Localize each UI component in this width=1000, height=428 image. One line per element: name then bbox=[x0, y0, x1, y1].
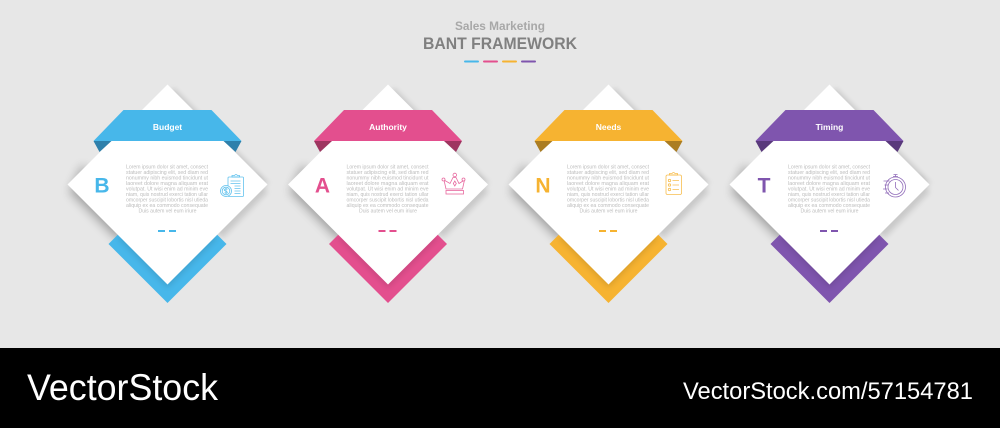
diamond bbox=[68, 84, 268, 284]
ribbon label: Budget bbox=[153, 122, 182, 132]
body text: Duis autem vel eum iriure bbox=[580, 208, 638, 214]
body text: aliquip ex ea commodo consequate bbox=[346, 203, 429, 209]
letter: B bbox=[94, 174, 110, 198]
body text: niam, quis nostrud exerci tation ullar bbox=[567, 192, 649, 198]
body text: volutpat. Ut wisi enim ad minim eve bbox=[567, 186, 649, 192]
small dashes bbox=[158, 230, 176, 232]
panel: Needs bbox=[508, 84, 710, 303]
body text: nonummy nibh euismod tincidunt ut bbox=[567, 176, 650, 182]
body text: aliquip ex ea commodo consequate bbox=[567, 203, 649, 209]
body text: laoreet dolore magna aliquam erat bbox=[788, 181, 871, 187]
panel: Authority bbox=[288, 84, 490, 303]
ribbon bbox=[534, 110, 682, 141]
body text: volutpat. Ut wisi enim ad minim eve bbox=[126, 186, 208, 192]
body text: omcorper suscipit lobortis nisl utieda bbox=[126, 198, 208, 204]
body text: Duis autem vel eum iriure bbox=[359, 208, 417, 214]
body text bbox=[346, 164, 429, 214]
body text bbox=[126, 164, 209, 214]
letter: A bbox=[315, 174, 330, 198]
body text: niam, quis nostrud exerci tation ullar bbox=[346, 192, 429, 198]
ribbon label: Authority bbox=[369, 122, 407, 132]
title colour dashes bbox=[464, 60, 536, 62]
body text: laoreet dolore magna aliquam erat bbox=[567, 181, 650, 187]
body text: laoreet dolore magna aliquam erat bbox=[346, 181, 429, 187]
ribbon label: Needs bbox=[596, 122, 622, 132]
body text: statuer adipiscing elit, sed diam red bbox=[788, 170, 870, 176]
ribbon label: Timing bbox=[816, 122, 843, 132]
diamond bbox=[508, 84, 708, 284]
diamond bbox=[288, 84, 488, 284]
ribbon bbox=[314, 110, 462, 141]
body text: Lorem ipsum dolor sit amet, consect bbox=[126, 164, 209, 170]
icon: stopwatch bbox=[883, 174, 906, 197]
letter: N bbox=[535, 174, 551, 198]
small dashes bbox=[820, 230, 838, 232]
body text: laoreet dolore magna aliquam erat bbox=[126, 181, 209, 187]
body text: nonummy nibh euismod tincidunt ut bbox=[126, 176, 209, 182]
small dashes bbox=[378, 230, 396, 232]
folds bbox=[534, 141, 682, 152]
panel: Timing bbox=[730, 84, 932, 303]
icon: crown bbox=[442, 173, 465, 194]
body text: Lorem ipsum dolor sit amet, consect bbox=[346, 164, 429, 170]
chevron bbox=[329, 234, 447, 303]
title bbox=[423, 21, 578, 53]
body text: omcorper suscipit lobortis nisl utieda bbox=[346, 198, 429, 204]
icon: clipboard with coin bbox=[220, 174, 244, 196]
body text: nonummy nibh euismod tincidunt ut bbox=[346, 176, 429, 182]
chevron bbox=[770, 234, 888, 303]
body text: Duis autem vel eum iriure bbox=[138, 208, 197, 214]
chevron bbox=[550, 234, 668, 303]
ribbon bbox=[756, 110, 904, 141]
body text: aliquip ex ea commodo consequate bbox=[126, 203, 208, 209]
letter: T bbox=[758, 174, 771, 198]
title: BANT FRAMEWORK bbox=[423, 34, 578, 53]
folds bbox=[756, 141, 904, 152]
footer url: VectorStock.com/57154781 bbox=[683, 378, 973, 405]
folds bbox=[314, 141, 462, 152]
body text: volutpat. Ut wisi enim ad minim eve bbox=[346, 186, 429, 192]
body text: statuer adipiscing elit, sed diam red bbox=[567, 170, 649, 176]
panel: Budget bbox=[68, 84, 270, 303]
body text: aliquip ex ea commodo consequate bbox=[788, 203, 870, 209]
body text: Duis autem vel eum iriure bbox=[800, 208, 859, 214]
small dashes bbox=[599, 230, 617, 232]
body text: niam, quis nostrud exerci tation ullar bbox=[788, 192, 870, 198]
body text bbox=[567, 164, 650, 214]
body text: volutpat. Ut wisi enim ad minim eve bbox=[788, 186, 870, 192]
diamond bbox=[730, 84, 930, 284]
body text: omcorper suscipit lobortis nisl utieda bbox=[567, 198, 649, 204]
folds bbox=[94, 141, 242, 152]
body text: Lorem ipsum dolor sit amet, consect bbox=[788, 164, 871, 170]
icon: checklist bbox=[666, 172, 682, 194]
body text: nonummy nibh euismod tincidunt ut bbox=[788, 176, 871, 182]
body text: omcorper suscipit lobortis nisl utieda bbox=[788, 198, 870, 204]
body text: statuer adipiscing elit, sed diam red bbox=[346, 170, 429, 176]
footer bar bbox=[0, 348, 1000, 428]
body text bbox=[788, 164, 871, 214]
body text: Lorem ipsum dolor sit amet, consect bbox=[567, 164, 650, 170]
body text: niam, quis nostrud exerci tation ullar bbox=[126, 192, 208, 198]
footer brand: VectorStock bbox=[27, 367, 218, 408]
body text: statuer adipiscing elit, sed diam red bbox=[126, 170, 208, 176]
title: Sales Marketing bbox=[455, 21, 545, 33]
ribbon bbox=[94, 110, 242, 141]
chevron bbox=[108, 234, 226, 303]
